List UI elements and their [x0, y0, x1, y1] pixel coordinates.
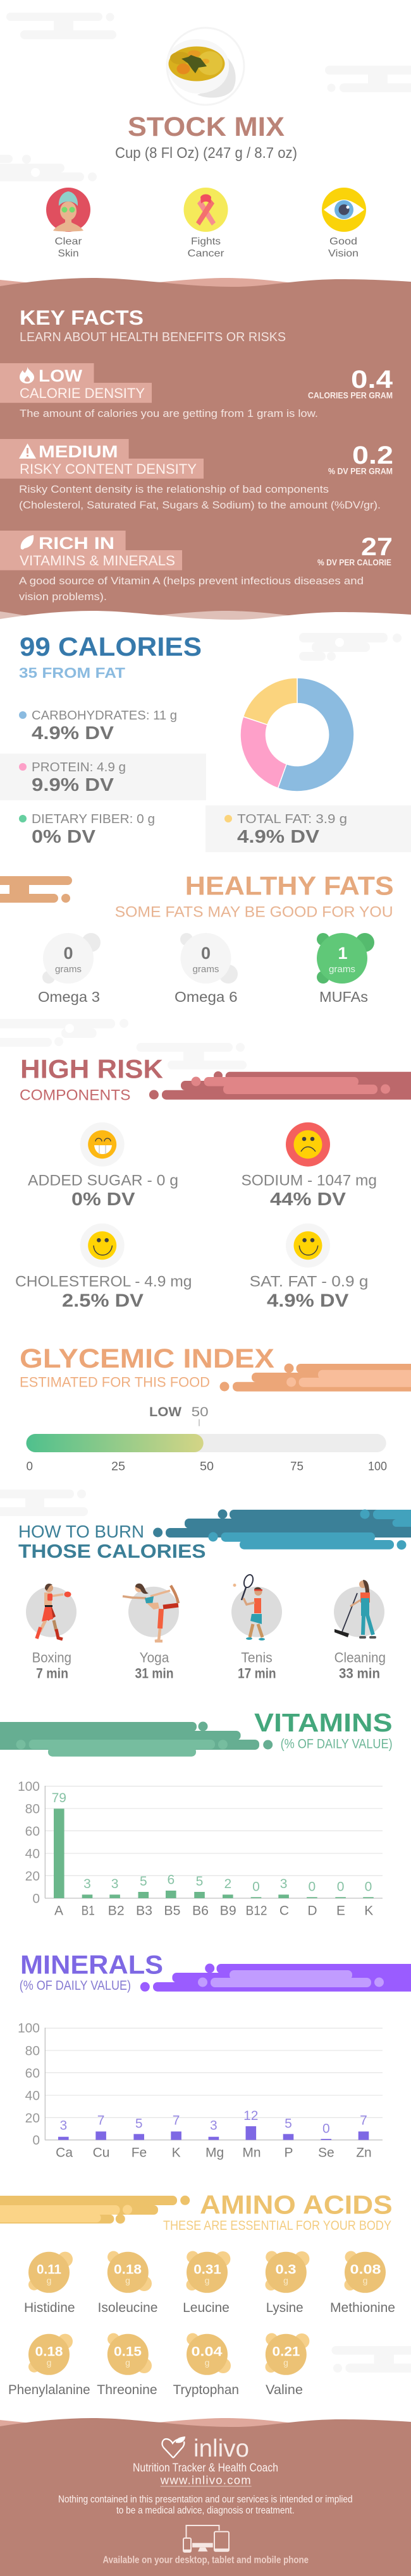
- bar chart: vitamins: 2: [224, 1877, 231, 1891]
- amino: tryptophan: 0.04: [191, 2344, 223, 2359]
- legend: protein: PROTEIN: 4.9 g: [32, 761, 126, 774]
- amino: tryptophan: [173, 2333, 239, 2397]
- bar chart: minerals: Mg: [206, 2145, 224, 2160]
- fact: calorie density: LOW: [39, 366, 83, 385]
- panel: amino acids: [0, 2189, 411, 2397]
- panel: key facts: [0, 278, 411, 629]
- gauge: glycemic value: 50: [192, 1405, 209, 1419]
- component: added sugar: ADDED SUGAR - 0 g: [28, 1172, 178, 1189]
- amino: phenylalanine: g: [47, 2357, 51, 2368]
- component: cholesterol: [15, 1224, 192, 1311]
- bar chart: vitamins: 0: [337, 1879, 344, 1894]
- component: sodium: [242, 1122, 377, 1210]
- bar chart: minerals: K: [172, 2145, 181, 2160]
- amino: tryptophan: Tryptophan: [173, 2383, 239, 2397]
- disclaimer: to be a medical advice, diagnosis or treatment.: [116, 2505, 295, 2516]
- gauge: glycemic value: 0: [27, 1460, 33, 1474]
- component: cholesterol: 2.5% DV: [62, 1291, 144, 1311]
- bar chart: vitamins: 3: [111, 1877, 118, 1891]
- heading: how to burn: HOW TO BURN: [18, 1522, 144, 1541]
- component: saturated fat: 4.9% DV: [267, 1291, 349, 1311]
- availability note: Available on your desktop, tablet and mobile phone: [102, 2555, 309, 2566]
- legend: protein: [19, 761, 126, 795]
- bar chart: minerals: 7: [173, 2113, 180, 2128]
- activity: tennis: Tenis: [241, 1650, 273, 1666]
- logo: inlivo wordmark: inlivo: [193, 2435, 249, 2462]
- heading: calories: 99 CALORIES: [20, 632, 202, 661]
- amino: lysine: Lysine: [266, 2301, 304, 2315]
- donut chart: [240, 678, 354, 791]
- ribbon: [0, 2196, 190, 2224]
- bar chart: vitamins: B5: [164, 1904, 180, 1918]
- amino: leucine: [183, 2251, 230, 2315]
- activity: boxing: Boxing: [32, 1650, 71, 1666]
- amino: histidine: 0.11: [37, 2262, 61, 2277]
- amino: methionine: 0.08: [350, 2262, 381, 2277]
- fat: omega 6: Omega 6: [175, 989, 238, 1005]
- fat: MUFAs: MUFAs: [319, 989, 368, 1005]
- bar chart: vitamins: B3: [136, 1904, 152, 1918]
- icon: devices: [183, 2525, 229, 2552]
- amino: valine: 0.21: [272, 2344, 300, 2359]
- benefit: good vision: [322, 188, 366, 259]
- fact: rich in vitamins and minerals: VITAMINS & MINERALS: [20, 553, 175, 569]
- gauge: glycemic value: 75: [290, 1460, 304, 1474]
- amino: threonine: 0.15: [114, 2344, 142, 2359]
- component: saturated fat: [250, 1224, 368, 1311]
- website link: www.inlivo.com: [160, 2474, 251, 2487]
- amino: histidine: g: [47, 2275, 51, 2285]
- activity: cleaning: Cleaning: [334, 1650, 386, 1666]
- bar chart: minerals: 0: [32, 2133, 40, 2148]
- component: sodium: SODIUM - 1047 mg: [242, 1172, 377, 1189]
- subheading: SOME FATS MAY BE GOOD FOR YOU: [115, 904, 393, 921]
- amino: isoleucine: [97, 2251, 158, 2315]
- bar chart: minerals: 12: [243, 2109, 258, 2123]
- fat: omega 6: grams: [192, 964, 219, 975]
- icon: soup bowl: [167, 28, 244, 105]
- bar chart: vitamins: 5: [196, 1874, 203, 1889]
- fact: risky content density: MEDIUM: [39, 442, 118, 461]
- bar chart: minerals: 5: [135, 2116, 143, 2131]
- bar chart: vitamins: D: [307, 1904, 317, 1918]
- fact: rich in vitamins and minerals: [0, 531, 393, 603]
- heading: glycemic index: GLYCEMIC INDEX: [20, 1344, 274, 1374]
- amino: lysine: [266, 2251, 309, 2315]
- amino: threonine: g: [125, 2357, 130, 2368]
- bar chart: minerals: 3: [59, 2119, 67, 2133]
- amino: methionine: Methionine: [330, 2301, 395, 2315]
- fact: rich in vitamins and minerals: % DV PER CALORIE: [317, 558, 391, 567]
- benefit: fights cancer: [183, 188, 228, 259]
- heading: minerals: MINERALS: [20, 1949, 163, 1979]
- bar chart: minerals: 40: [25, 2088, 40, 2103]
- bar chart: minerals: 7: [360, 2113, 367, 2128]
- fat: MUFAs: [317, 933, 374, 1005]
- title: STOCK MIX: [128, 112, 285, 142]
- fat: omega 3: Omega 3: [38, 989, 100, 1005]
- fact: risky content density: % DV PER GRAM: [328, 467, 393, 476]
- subheading: LEARN ABOUT HEALTH BENEFITS OR RISKS: [20, 330, 286, 344]
- benefit: clear skin: Skin: [58, 248, 78, 259]
- amino: lysine: 0.3: [276, 2262, 296, 2277]
- bar chart: vitamins: A: [54, 1904, 63, 1918]
- subheading: (% OF DAILY VALUE): [281, 1737, 393, 1752]
- serving size: Cup (8 Fl Oz) (247 g / 8.7 oz): [115, 145, 297, 162]
- bar chart: minerals: P: [284, 2145, 293, 2160]
- bar chart: minerals: 20: [25, 2111, 40, 2126]
- bar chart: vitamins: 100: [18, 1779, 40, 1794]
- bar chart: minerals: Zn: [356, 2145, 372, 2160]
- amino: valine: Valine: [266, 2383, 303, 2397]
- heading: amino acids: AMINO ACIDS: [200, 2189, 393, 2219]
- fat: MUFAs: grams: [329, 964, 355, 975]
- component: added sugar: 0% DV: [71, 1189, 135, 1210]
- bar chart: vitamins: E: [336, 1904, 345, 1918]
- fat: omega 3: grams: [55, 964, 82, 975]
- bar chart: vitamins: 40: [25, 1847, 40, 1861]
- band backgrounds: [0, 754, 411, 852]
- bar chart: vitamins: 3: [280, 1877, 287, 1891]
- bar chart: minerals: 7: [97, 2113, 104, 2128]
- bar chart: minerals: 60: [25, 2066, 40, 2081]
- amino: isoleucine: 0.18: [114, 2262, 142, 2277]
- bar chart: minerals: 100: [18, 2021, 40, 2036]
- amino: phenylalanine: [8, 2334, 90, 2397]
- legend: total fat: [224, 812, 347, 847]
- amino: tryptophan: g: [205, 2357, 209, 2368]
- gauge: glycemic value: [27, 1405, 387, 1474]
- fact: calorie density: [0, 363, 393, 419]
- subheading: from fat: 35 FROM FAT: [19, 665, 125, 681]
- gauge: glycemic value: LOW: [149, 1405, 181, 1419]
- fat: omega 3: [38, 933, 101, 1005]
- amino: isoleucine: g: [125, 2275, 130, 2285]
- amino: methionine: g: [363, 2275, 367, 2285]
- benefit: fights cancer: Cancer: [187, 248, 224, 259]
- bar chart: vitamins: K: [364, 1904, 373, 1918]
- activity: boxing: 7 min: [36, 1666, 68, 1682]
- amino: lysine: g: [283, 2275, 288, 2285]
- disclaimer: Nothing contained in this presentation and our services is intended or implied: [58, 2495, 353, 2505]
- amino: methionine: [330, 2251, 395, 2315]
- ribbon: [153, 1510, 411, 1550]
- component: sodium: 44% DV: [270, 1189, 347, 1210]
- bar chart: minerals: Ca: [56, 2145, 73, 2160]
- activity: cleaning: [334, 1580, 386, 1682]
- amino: threonine: Threonine: [97, 2383, 157, 2397]
- bar chart: minerals: 0: [322, 2122, 330, 2136]
- bar chart: vitamins: B6: [192, 1904, 209, 1918]
- bar chart: minerals: 80: [25, 2043, 40, 2058]
- gauge: glycemic value: 50: [200, 1460, 214, 1474]
- ribbon: [149, 1071, 411, 1100]
- fact: calorie density: 0.4: [351, 366, 393, 394]
- gauge: glycemic value: 25: [111, 1460, 125, 1474]
- heading: those calories: THOSE CALORIES: [18, 1540, 206, 1562]
- activity: yoga: [123, 1584, 179, 1682]
- benefit: clear skin: Clear: [54, 236, 82, 247]
- bar chart: vitamins: [18, 1779, 383, 1918]
- fact: rich in vitamins and minerals: 27: [361, 533, 393, 561]
- benefit: good vision: Vision: [328, 248, 359, 259]
- amino: threonine: [97, 2333, 157, 2397]
- header panel: [0, 13, 411, 259]
- legend: carbohydrates: 4.9% DV: [32, 723, 114, 743]
- subheading: components: COMPONENTS: [20, 1087, 130, 1104]
- bar chart: vitamins: B2: [108, 1904, 125, 1918]
- component: saturated fat: SAT. FAT - 0.9 g: [250, 1273, 368, 1291]
- subheading: (% OF DAILY VALUE): [20, 1978, 131, 1993]
- fact: rich in vitamins and minerals: A good source of Vitamin A (helps prevent infectious diseases and: [19, 575, 364, 587]
- bar chart: minerals: [18, 2021, 383, 2160]
- bar chart: vitamins: 0: [309, 1879, 316, 1894]
- panel: vitamins: [0, 1708, 393, 1918]
- fat: omega 3: 0: [63, 944, 73, 963]
- bar chart: vitamins: B9: [220, 1904, 236, 1918]
- bar chart: vitamins: B1: [82, 1904, 95, 1918]
- amino: leucine: Leucine: [183, 2301, 230, 2315]
- amino: histidine: Histidine: [24, 2301, 75, 2315]
- bar chart: vitamins: 60: [25, 1824, 40, 1839]
- bar chart: minerals: 5: [285, 2116, 292, 2131]
- fact: calorie density: CALORIE DENSITY: [20, 385, 145, 401]
- fat: omega 6: [175, 933, 238, 1005]
- benefit: clear skin: [46, 188, 90, 259]
- bar chart: vitamins: 0: [365, 1879, 372, 1894]
- activity: tennis: [231, 1574, 282, 1682]
- legend: total fat: 4.9% DV: [237, 827, 320, 847]
- legend: protein: 9.9% DV: [32, 775, 114, 795]
- panel: calories: [0, 632, 411, 852]
- component: cholesterol: CHOLESTEROL - 4.9 mg: [15, 1273, 192, 1291]
- amino: valine: [266, 2333, 309, 2397]
- bar chart: vitamins: 20: [25, 1869, 40, 1884]
- bar chart: vitamins: 5: [140, 1874, 147, 1889]
- legend: carbohydrates: [19, 709, 177, 743]
- bar chart: minerals: Se: [318, 2145, 334, 2160]
- tagline: Nutrition Tracker & Health Coach: [133, 2462, 278, 2474]
- bar chart: minerals: Mn: [242, 2145, 261, 2160]
- activity: cleaning: 33 min: [339, 1666, 380, 1682]
- fact: calorie density: The amount of calories you are getting from 1 gram is low.: [20, 407, 318, 419]
- bar chart: vitamins: 6: [167, 1873, 175, 1887]
- subheading: ESTIMATED FOR THIS FOOD: [20, 1375, 210, 1390]
- panel: healthy fats: [0, 871, 394, 1005]
- activity: yoga: 31 min: [135, 1666, 173, 1682]
- bar chart: minerals: 3: [210, 2119, 218, 2133]
- benefit: good vision: Good: [329, 236, 357, 247]
- fact: calorie density: CALORIES PER GRAM: [308, 391, 393, 400]
- activity: tennis: 17 min: [238, 1666, 276, 1682]
- amino: valine: g: [283, 2357, 288, 2368]
- logo: inlivo heart: [162, 2436, 185, 2458]
- legend: carbohydrates: CARBOHYDRATES: 11 g: [32, 709, 177, 723]
- amino: phenylalanine: Phenylalanine: [8, 2383, 90, 2397]
- activity: boxing: [26, 1584, 77, 1682]
- fact: risky content density: [0, 439, 393, 511]
- legend: total fat: TOTAL FAT: 3.9 g: [237, 812, 347, 826]
- heading: key facts: KEY FACTS: [20, 306, 144, 329]
- amino: leucine: 0.31: [193, 2262, 221, 2277]
- amino: leucine: g: [205, 2275, 209, 2285]
- bar chart: vitamins: 0: [252, 1879, 260, 1894]
- bar chart: vitamins: 79: [52, 1791, 66, 1805]
- fat: MUFAs: 1: [338, 944, 348, 963]
- panel: minerals: [18, 1949, 411, 2160]
- heading: vitamins: VITAMINS: [254, 1708, 393, 1737]
- gauge: glycemic value: 100: [368, 1460, 387, 1474]
- bar chart: vitamins: B12: [245, 1904, 267, 1918]
- panel: glycemic index: [20, 1344, 411, 1474]
- activity: yoga: Yoga: [140, 1650, 169, 1666]
- bar chart: vitamins: 0: [32, 1891, 40, 1906]
- disclaimer: [58, 2495, 353, 2516]
- amino: isoleucine: Isoleucine: [97, 2301, 158, 2315]
- ribbon: [140, 1963, 411, 1992]
- legend: dietary fiber: DIETARY FIBER: 0 g: [32, 812, 155, 826]
- bar chart: minerals: Fe: [132, 2145, 147, 2160]
- ribbon: [0, 876, 72, 903]
- ribbon: [0, 1722, 273, 1757]
- fact: rich in vitamins and minerals: vision problems).: [19, 591, 107, 603]
- amino: histidine: [24, 2252, 75, 2315]
- legend: dietary fiber: 0% DV: [32, 827, 96, 847]
- bar chart: vitamins: 3: [83, 1877, 91, 1891]
- footer panel: [0, 2418, 411, 2576]
- benefit: fights cancer: Fights: [191, 236, 221, 247]
- panel: burn calories: [0, 1490, 411, 1682]
- ribbon: [220, 1363, 411, 1392]
- fact: risky content density: RISKY CONTENT DENSITY: [20, 461, 197, 477]
- component: added sugar: [28, 1122, 178, 1210]
- fact: rich in vitamins and minerals: RICH IN: [39, 534, 114, 553]
- panel: high risk components: [0, 1019, 411, 1311]
- amino: phenylalanine: 0.18: [35, 2344, 63, 2359]
- fat: omega 6: 0: [201, 944, 211, 963]
- bar chart: vitamins: 80: [25, 1802, 40, 1817]
- fact: risky content density: (Cholesterol, Saturated Fat, Sugars & Sodium) to the amount (%DV/gr).: [19, 499, 381, 511]
- bar chart: vitamins: C: [279, 1904, 289, 1918]
- heading: healthy fats: HEALTHY FATS: [185, 871, 394, 901]
- fact: risky content density: 0.2: [352, 442, 393, 469]
- heading: high risk: HIGH RISK: [20, 1054, 163, 1084]
- fact: risky content density: Risky Content density is the relationship of bad components: [19, 483, 329, 495]
- bar chart: minerals: Cu: [93, 2145, 109, 2160]
- legend: dietary fiber: [19, 812, 155, 847]
